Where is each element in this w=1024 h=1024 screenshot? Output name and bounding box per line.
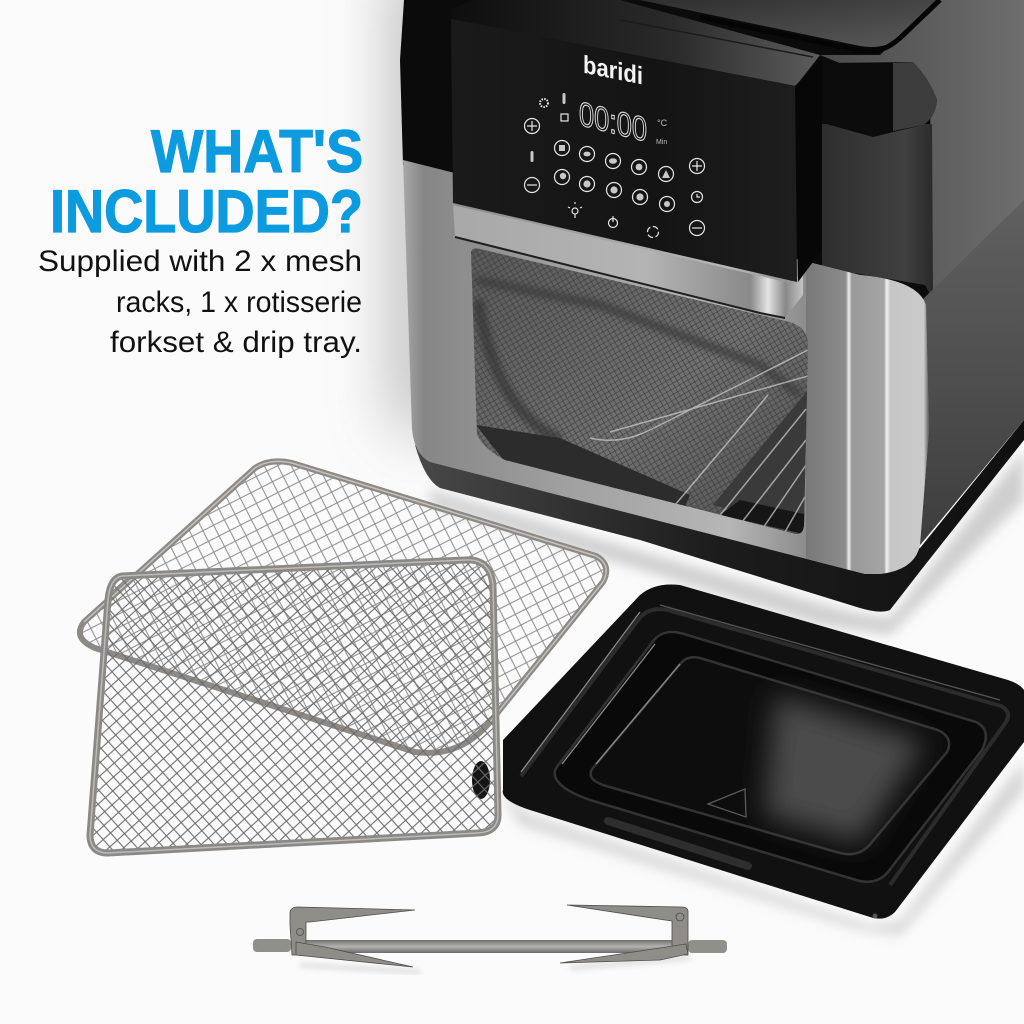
steel column [806,260,931,580]
tray middle step [555,632,986,882]
fryer front upper face [822,124,933,300]
rotisserie forkset [253,905,727,972]
heat warning icon [708,789,746,817]
tray rim bevel [521,609,1008,885]
timer display: 00:00 [579,95,647,150]
unit labels: Min [656,139,667,146]
description text: racks, 1 x rotisserie [116,286,362,319]
fryer upper body [400,0,1024,307]
description text: forkset & drip tray. [110,326,362,359]
title: WHAT'S [151,118,363,185]
air fryer [400,0,1024,635]
tray seen through mesh [472,761,490,799]
oven window [465,240,815,540]
drip tray [500,584,1024,935]
button glyphs [530,93,670,207]
fryer lid [640,0,936,47]
title: INCLUDED? [50,178,363,245]
front mesh rack [90,560,498,853]
soft wall shadow [395,0,450,430]
tray reflection [765,695,925,842]
tray inner panel [591,657,949,854]
control panel [450,0,822,282]
title [50,118,363,245]
back mesh rack [80,461,606,753]
logo: baridi [583,51,643,91]
unit labels: °C [657,118,668,128]
description text [38,245,362,359]
right fork [560,905,688,963]
fryer lower side [916,200,1024,550]
description text: Supplied with 2 x mesh [38,245,362,278]
fryer corner trim [823,62,937,137]
tray groove [608,821,748,866]
fryer top right face [820,0,1024,307]
rotisserie rod [300,940,685,953]
control buttons [524,99,704,238]
tray hole [872,914,878,918]
unit labels [656,118,668,146]
steel strip [453,205,803,318]
fryer base [415,420,1024,612]
left fork [290,907,415,967]
steel front [403,160,929,574]
